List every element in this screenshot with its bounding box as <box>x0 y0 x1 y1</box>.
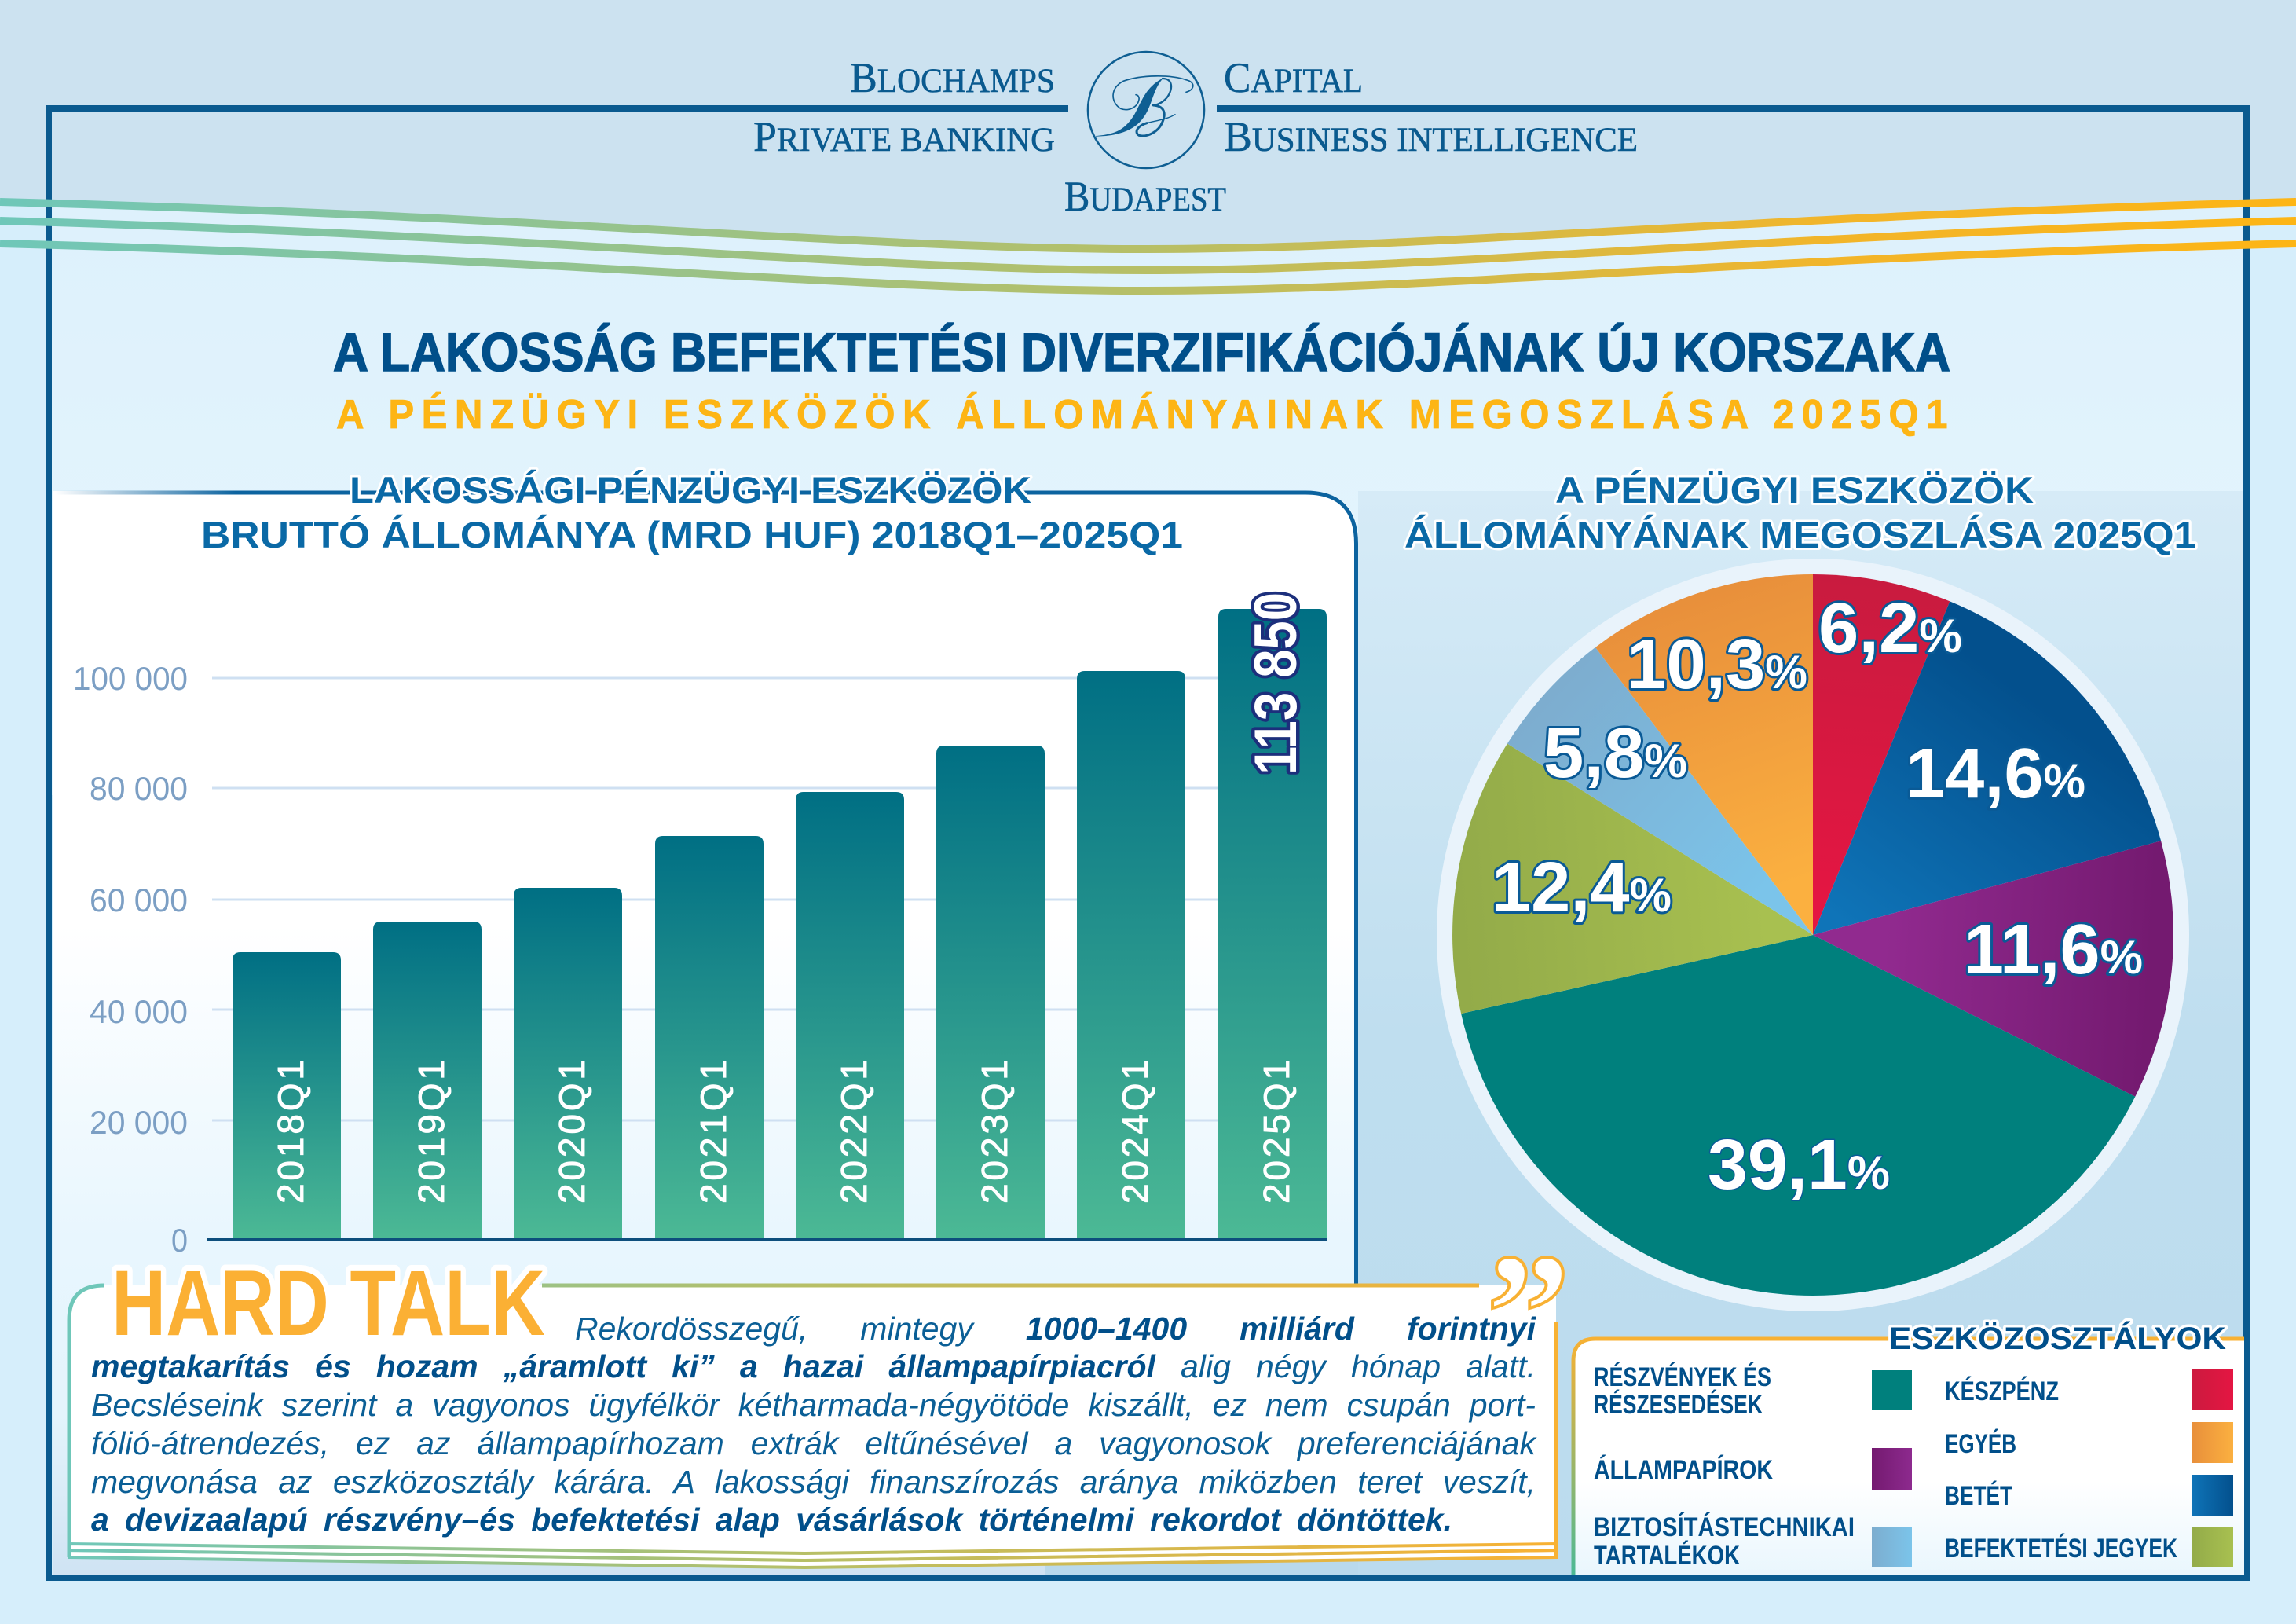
bar year labels: 2024Q1 <box>1115 1060 1155 1204</box>
logo right bottom text: BUSINESS INTELLIGENCE <box>1224 113 1638 160</box>
pie percentage labels: 39,1% <box>1708 1126 1890 1204</box>
y axis labels: 40 000 <box>90 993 188 1030</box>
logo emblem: circled script B <box>1088 52 1204 168</box>
hard talk heading: HARD TALK <box>112 1252 545 1355</box>
panel: bar chart white card <box>53 491 1358 1577</box>
slice: állampapírok 11,6% <box>1813 841 2173 1097</box>
bar chart heading: BRUTTÓ ÁLLOMÁNYA (MRD HUF) 2018Q1–2025Q1 <box>201 514 1183 555</box>
text block: hard talk commentary: a devizaalapú részvény–és befektetési alap vásárlások történelmi rekordot döntöttek. <box>91 1501 1452 1538</box>
slice: befektetési jegyek 12,4% <box>1452 743 1813 1014</box>
y axis labels: 100 000 <box>73 660 188 697</box>
bar chart heading <box>201 469 1183 555</box>
pie chart heading <box>1404 469 2196 555</box>
bars <box>233 609 1327 1239</box>
legend labels: RÉSZVÉNYEK ÉS <box>1594 1362 1771 1392</box>
slice: egyéb 10,3% <box>1595 574 1813 935</box>
panel: legend <box>1573 1321 2244 1577</box>
y axis labels: 0 <box>171 1222 188 1259</box>
logo left top text: BLOCHAMPS <box>850 54 1055 101</box>
x axis baseline <box>207 1238 1327 1241</box>
legend labels: ÁLLAMPAPÍROK <box>1594 1455 1773 1485</box>
text block: hard talk commentary: megtakarítás és hozam „áramlott ki” a hazai állampapírpiacról alig négy hónap alatt. <box>91 1348 1536 1384</box>
logo left bottom text: PRIVATE BANKING <box>753 113 1055 160</box>
bar year labels: 2019Q1 <box>411 1060 452 1204</box>
logo city text: BUDAPEST <box>1064 173 1226 220</box>
bar year labels: 2022Q1 <box>833 1060 874 1204</box>
bar chart <box>73 592 1327 1259</box>
grid lines <box>212 678 1327 1120</box>
legend labels: BIZTOSÍTÁSTECHNIKAI <box>1594 1512 1855 1542</box>
y axis labels: 80 000 <box>90 770 188 807</box>
slice: készpénz 6,2% <box>1813 574 1950 935</box>
pie chart heading: ÁLLOMÁNYÁNAK MEGOSZLÁSA 2025Q1 <box>1404 514 2196 555</box>
closing quote mark: ” <box>1486 1219 1571 1406</box>
inner page background <box>46 105 2250 795</box>
text block: hard talk commentary: Becsléseink szerint a vagyonos ügyfélkör kétharmada-négyötöde kiszállt, ez nem csupán port- <box>91 1387 1536 1423</box>
legend labels: BEFEKTETÉSI JEGYEK <box>1945 1534 2177 1564</box>
bar chart card top and right border <box>55 493 1356 1289</box>
bar year labels: 2018Q1 <box>270 1060 311 1204</box>
bar year labels: 2023Q1 <box>974 1060 1015 1204</box>
legend labels: BETÉT <box>1945 1481 2012 1511</box>
wave ribbons <box>0 202 2296 291</box>
pie percentage labels: 5,8% <box>1543 714 1687 793</box>
slice: biztosítástechnikai 5,8% <box>1507 647 1813 935</box>
header band <box>0 0 2296 249</box>
text block: hard talk commentary: fólió-átrendezés, ez az állampapírhozam extrák eltűnésével a vagyonosok preferenciájának <box>91 1425 1536 1461</box>
pie chart heading: A PÉNZÜGYI ESZKÖZÖK <box>1555 469 2034 511</box>
pie percentage labels: 14,6% <box>1906 735 2085 813</box>
bar year labels: 2021Q1 <box>693 1060 734 1204</box>
pie percentage labels: 11,6% <box>1964 911 2143 989</box>
legend labels: TARTALÉKOK <box>1594 1541 1740 1571</box>
pie chart <box>1437 559 2189 1311</box>
frame bottom edge over panels <box>46 1575 2250 1581</box>
value label for 2025Q1: 113 850 <box>1243 592 1309 775</box>
logo: Blochamps Capital wordmark <box>753 52 1638 220</box>
bar year labels: 2020Q1 <box>551 1060 592 1204</box>
pie percentage labels: 12,4% <box>1492 849 1672 927</box>
text block: hard talk commentary: Rekordösszegű, mintegy 1000–1400 milliárd forintnyi <box>575 1311 1536 1347</box>
legend labels: KÉSZPÉNZ <box>1945 1377 2059 1406</box>
legend swatches <box>1872 1369 2233 1567</box>
y axis labels <box>73 660 188 1259</box>
slice: részvények 39,1% <box>1461 935 2135 1296</box>
card bottom page lines <box>69 1544 1556 1567</box>
pie ring <box>1437 559 2189 1311</box>
blue strip beneath hard talk card <box>1045 1560 1358 1577</box>
panel: right column background <box>1358 491 2246 1577</box>
y axis labels: 60 000 <box>90 882 188 918</box>
bar year labels: 2025Q1 <box>1256 1060 1297 1204</box>
bar year labels <box>270 1060 1297 1204</box>
pie percentage labels: 6,2% <box>1818 589 1962 668</box>
legend labels: EGYÉB <box>1945 1429 2016 1459</box>
title: A LAKOSSÁG BEFEKTETÉSI DIVERZIFIKÁCIÓJÁNAK ÚJ KORSZAKA <box>333 322 1950 383</box>
panel: hard talk card <box>69 1219 1571 1567</box>
pie percentage labels: 10,3% <box>1627 625 1807 704</box>
subtitle: A PÉNZÜGYI ESZKÖZÖK ÁLLOMÁNYAINAK MEGOSZLÁSA 2025Q1 <box>336 392 1955 438</box>
legend title: ESZKÖZOSZTÁLYOK <box>1889 1321 2226 1356</box>
bar chart heading: LAKOSSÁGI PÉNZÜGYI ESZKÖZÖK <box>350 469 1031 511</box>
legend labels: RÉSZESEDÉSEK <box>1594 1390 1763 1420</box>
logo right top text: CAPITAL <box>1224 54 1363 101</box>
pie percentage labels <box>1492 589 2143 1204</box>
slice: betét 14,6% <box>1813 601 2161 935</box>
legend labels <box>1594 1362 2177 1571</box>
text block: hard talk commentary: megvonása az eszközosztály kárára. A lakossági finanszírozás aránya miközben teret veszít, <box>91 1464 1536 1500</box>
y axis labels: 20 000 <box>90 1104 188 1141</box>
